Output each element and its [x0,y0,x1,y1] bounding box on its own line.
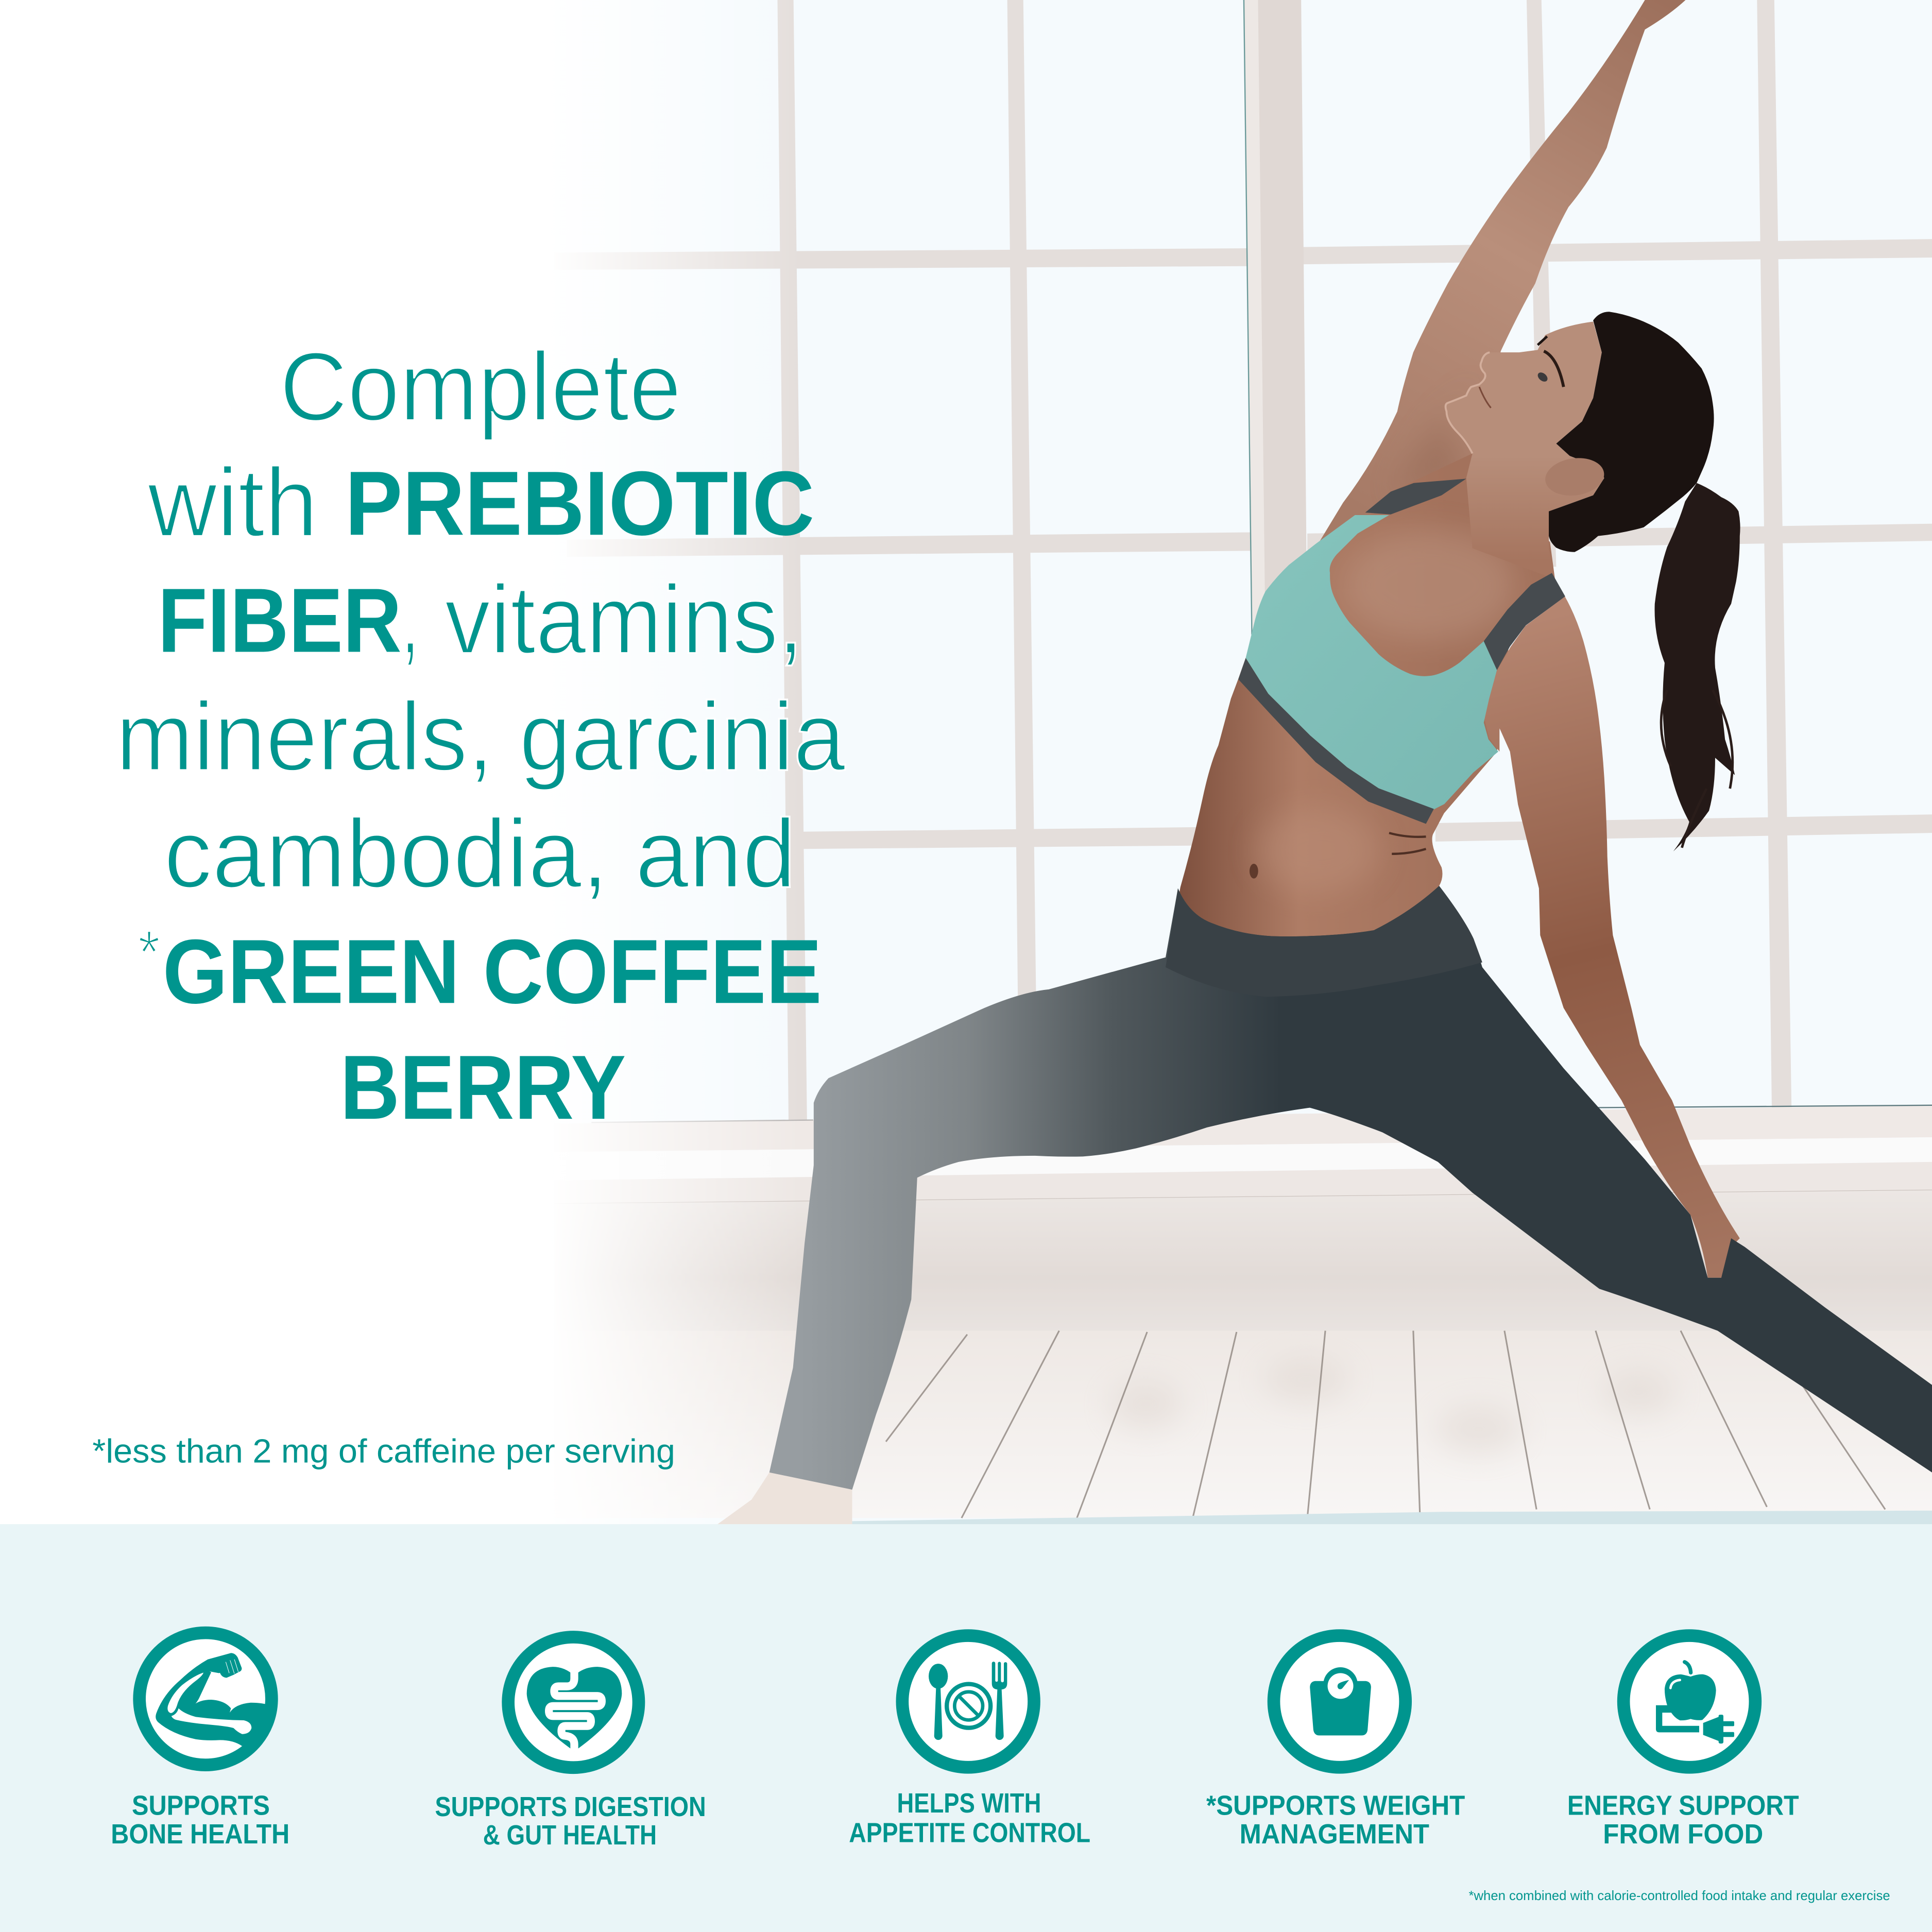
headline text: PREBIOTIC [345,452,814,554]
wooden floor [554,1331,1932,1518]
label: helps with appetite control [849,1788,1090,1848]
headline text: GREEN COFFEE [163,920,822,1022]
leggings [770,886,1932,1490]
face profile highlight [1446,352,1490,453]
ear [1543,454,1606,499]
bottom benefits panel [0,1524,1932,1932]
raised arm [1319,0,1686,543]
headline text: FIBER [158,569,402,671]
central window pillar [1244,0,1307,641]
window mullions [554,0,1932,1124]
icon: weighing scale [1274,1636,1406,1767]
headline text: Complete [280,333,681,441]
ponytail [1655,483,1740,851]
headline text: with [147,449,318,557]
headline text: BERRY [340,1036,626,1138]
icon: heart and gut [508,1637,639,1768]
woman in side-stretch yoga pose [716,0,1932,1526]
headline text: * [138,918,160,987]
label: supports bone health [111,1790,289,1850]
headline text [116,333,846,1138]
label: supports digestion and gut health [435,1791,706,1851]
headline text: cambodia, and [164,799,796,908]
label: supports weight management: *SUPPORTS WEIGHT [1206,1790,1465,1821]
navel [1250,864,1258,879]
caffeine footnote: *less than 2 mg of caffeine per serving [92,1433,675,1470]
headline text: vitamins, [445,566,803,674]
lowered arm [1483,596,1740,1278]
foot [716,1473,852,1526]
icon: muscle and bone [140,1633,275,1765]
face and neck [1446,321,1604,579]
torso skin [1171,453,1555,959]
label: energy support from food: ENERGY SUPPORT [1567,1790,1799,1821]
white fade overlay on the left [0,0,801,1528]
label: supports weight management [1206,1790,1465,1850]
label: energy support from food [1567,1790,1799,1850]
weight management footnote: *when combined with calorie-controlled food intake and regular exercise [1469,1888,1890,1903]
label: helps with appetite control: HELPS WITH [897,1788,1041,1819]
window sill and ledge [554,1105,1932,1152]
label: supports digestion and gut health: & GUT HEALTH [483,1820,657,1851]
facial features [1479,336,1564,408]
headline text: minerals, garcinia [116,682,846,791]
label: supports weight management: MANAGEMENT [1240,1819,1429,1850]
armpit shadow behind the face [1392,370,1485,493]
label: helps with appetite control: APPETITE CONTROL [849,1817,1090,1848]
label: supports bone health: SUPPORTS [132,1790,270,1821]
waistband [1166,886,1482,997]
icon: plate and cutlery [902,1636,1034,1767]
label: supports bone health: BONE HEALTH [111,1819,289,1850]
sports bra [1238,478,1565,824]
icon: apple with plug [1623,1636,1755,1767]
hair [1549,312,1714,552]
label: supports digestion and gut health: SUPPORTS DIGESTION [435,1791,706,1822]
background photo: studio window and floor [0,0,1932,1528]
headline text: , [402,566,419,674]
label: energy support from food: FROM FOOD [1603,1819,1763,1850]
